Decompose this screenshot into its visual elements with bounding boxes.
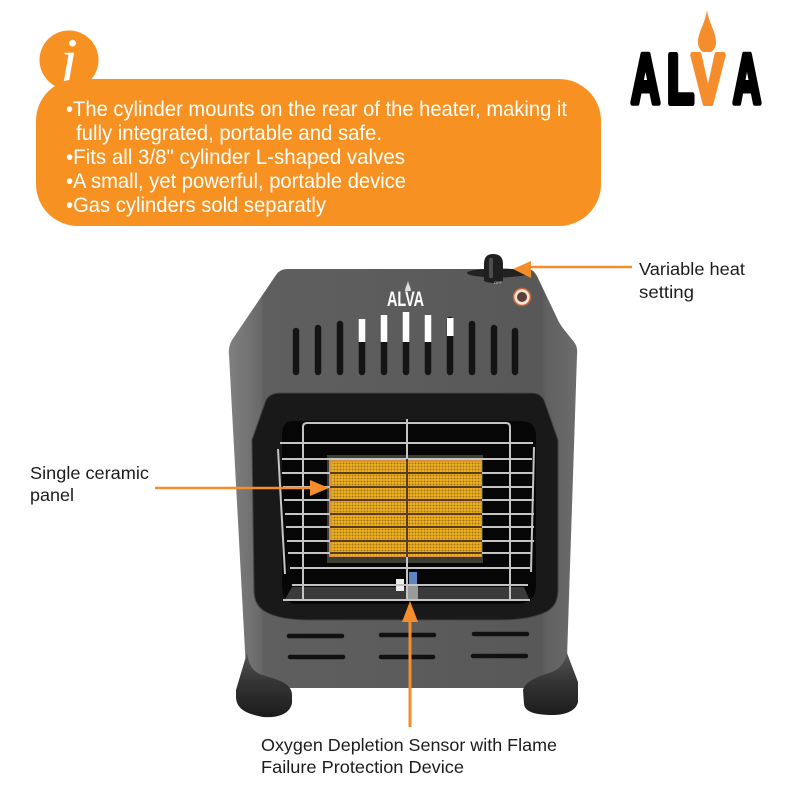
heater (229, 254, 578, 717)
ALVA logo: V (692, 40, 724, 118)
label: oxygen depletion sensor: Oxygen Depletion Sensor with Flame (261, 735, 557, 755)
no-insect sticker (514, 288, 530, 306)
heater logo (387, 281, 424, 311)
label: variable heat setting: setting (639, 282, 694, 302)
info badge: i (60, 25, 78, 96)
heater logo: ALVA (387, 288, 424, 311)
label: single ceramic panel: Single ceramic (30, 463, 149, 483)
top vents (296, 312, 515, 372)
burner and sensor (396, 572, 418, 600)
ALVA logo: L (667, 40, 694, 118)
feature list: •The cylinder mounts on the rear of the heater, making it (66, 97, 567, 121)
heater body (229, 269, 577, 688)
bottom vents (289, 634, 527, 657)
ALVA logo: A (733, 40, 761, 118)
arrow: single ceramic panel (155, 480, 329, 496)
control knob (467, 254, 529, 285)
orange feature box (36, 79, 601, 226)
window surround (252, 393, 558, 620)
ALVA logo (631, 10, 761, 118)
label: variable heat setting: Variable heat (639, 259, 745, 279)
label: oxygen depletion sensor (261, 735, 557, 777)
firebox (282, 421, 536, 604)
label: single ceramic panel: panel (30, 485, 74, 505)
control knob: OFF (494, 280, 503, 285)
wire guard (278, 419, 534, 600)
panel wire shadows (330, 459, 482, 557)
info badge (40, 25, 98, 96)
feature list: •A small, yet powerful, portable device (66, 169, 406, 193)
label: oxygen depletion sensor: Failure Protection Device (261, 757, 464, 777)
feature list: •Fits all 3/8" cylinder L-shaped valves (66, 145, 405, 169)
firebox floor reflection (284, 587, 530, 601)
ceramic panel (327, 455, 483, 563)
arrow: variable heat setting (513, 261, 632, 278)
ALVA logo: A (631, 40, 660, 118)
feature list: fully integrated, portable and safe. (76, 121, 382, 145)
right foot (523, 653, 578, 715)
label: single ceramic panel (30, 463, 149, 505)
feature list (66, 97, 567, 217)
left foot (236, 653, 292, 717)
feature list: •Gas cylinders sold separatly (66, 193, 326, 217)
label: variable heat setting (639, 259, 745, 302)
arrow: oxygen depletion sensor (402, 601, 418, 727)
info panel (36, 25, 601, 226)
